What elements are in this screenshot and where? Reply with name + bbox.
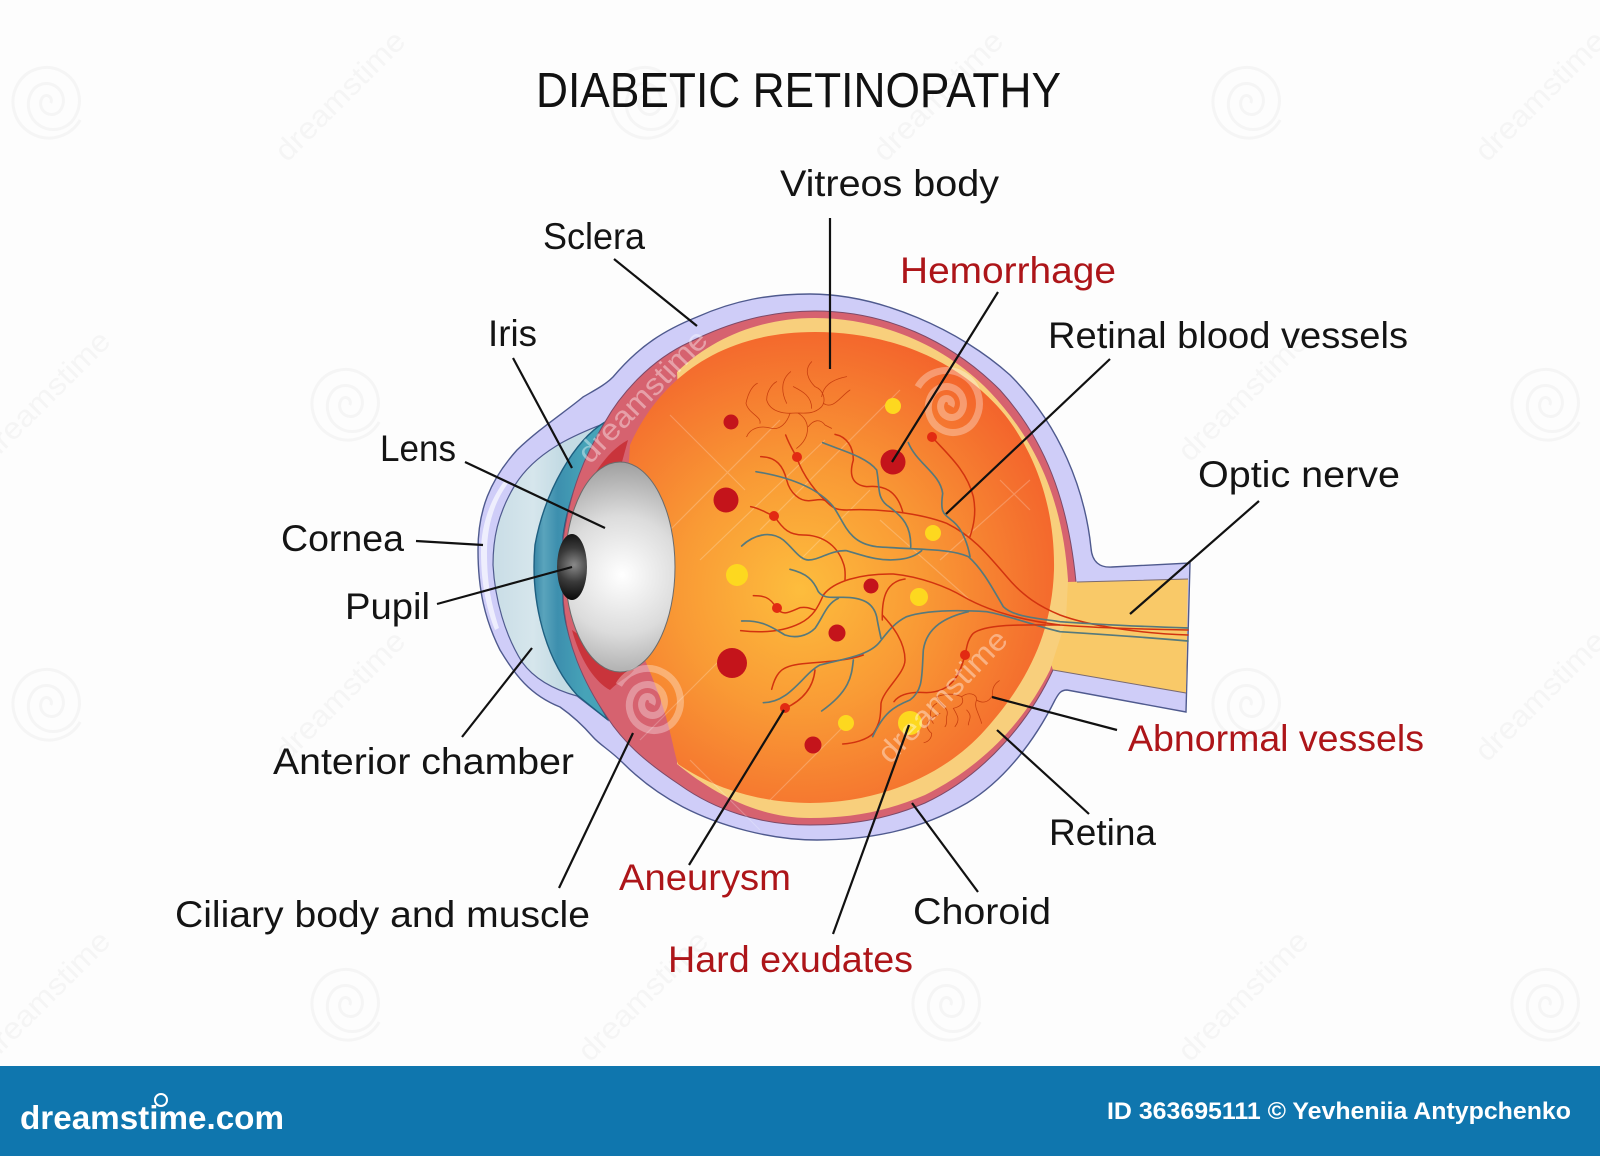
hemorrhage spots bbox=[714, 414, 906, 754]
choroid and ciliary body bbox=[563, 311, 1076, 825]
label: Retinal blood vessels: Retinal blood vessels bbox=[1048, 315, 1408, 356]
watermark pattern: dreamstime bbox=[269, 24, 412, 168]
logo text: dreamstime.com bbox=[20, 1099, 284, 1136]
abnormal vessels upper bbox=[746, 362, 850, 448]
watermark pattern: dreamstime bbox=[572, 924, 715, 1068]
retina bbox=[677, 318, 1068, 818]
label: Hemorrhage: Hemorrhage bbox=[900, 250, 1116, 291]
label: Iris: Iris bbox=[488, 313, 537, 354]
dark ciliary muscle bbox=[570, 440, 634, 690]
watermark crosses bbox=[640, 390, 1030, 830]
hard exudates bbox=[726, 398, 941, 735]
watermark pattern: dreamstime bbox=[269, 624, 412, 768]
logo spiral bbox=[155, 1094, 167, 1106]
cornea highlight bbox=[481, 480, 509, 630]
label: Lens bbox=[380, 428, 605, 528]
label: Sclera: Sclera bbox=[543, 216, 645, 257]
label: Sclera bbox=[543, 216, 697, 326]
watermark pattern: dreamstime bbox=[867, 24, 1010, 168]
label: Choroid: Choroid bbox=[913, 891, 1051, 932]
watermark over eye bbox=[571, 323, 1015, 770]
label: Pupil bbox=[345, 567, 572, 627]
watermark pattern: dreamstime bbox=[1172, 924, 1315, 1068]
anterior chamber bbox=[493, 423, 608, 720]
label: Hemorrhage bbox=[892, 250, 1116, 462]
label: Anterior chamber: Anterior chamber bbox=[273, 741, 574, 782]
sclera bbox=[478, 294, 1190, 840]
label: Aneurysm: Aneurysm bbox=[619, 857, 791, 898]
eye diagram bbox=[478, 294, 1190, 840]
vitreous body bbox=[620, 332, 1054, 803]
abnormal vessels lower bbox=[924, 681, 999, 743]
label: Retinal blood vessels bbox=[946, 315, 1408, 514]
label: Abnormal vessels bbox=[992, 697, 1424, 759]
watermark pattern: dreamstime bbox=[1172, 324, 1315, 468]
label: Anterior chamber bbox=[273, 648, 574, 782]
retinal blood vessels lower bbox=[763, 612, 1060, 744]
label: Ciliary body and muscle: Ciliary body and muscle bbox=[175, 894, 590, 935]
label: Pupil: Pupil bbox=[345, 586, 430, 627]
optic nerve bbox=[1030, 579, 1188, 693]
label: Aneurysm bbox=[619, 710, 791, 898]
watermark over eye: dreamstime bbox=[571, 323, 715, 470]
label: Abnormal vessels: Abnormal vessels bbox=[1128, 718, 1424, 759]
label: Cornea: Cornea bbox=[281, 518, 404, 559]
label: Hard exudates bbox=[668, 725, 913, 980]
label: Vitreos body: Vitreos body bbox=[780, 163, 1000, 204]
label: Optic nerve: Optic nerve bbox=[1198, 454, 1400, 495]
label: Hard exudates: Hard exudates bbox=[668, 939, 913, 980]
label: Lens: Lens bbox=[380, 428, 456, 469]
label: Cornea bbox=[281, 518, 483, 559]
label: Retina bbox=[997, 730, 1156, 853]
footer banner bbox=[0, 1066, 1600, 1156]
label: Retina: Retina bbox=[1049, 812, 1156, 853]
retinal blood vessels upper bbox=[741, 434, 1188, 642]
aneurysms bbox=[769, 432, 970, 713]
image credit: ID 363695111 © Yevheniia Antypchenko bbox=[1107, 1098, 1571, 1125]
iris bbox=[534, 422, 608, 720]
watermark pattern: dreamstime bbox=[1469, 24, 1600, 168]
title: DIABETIC RETINOPATHY bbox=[536, 64, 1061, 118]
label: Iris bbox=[488, 313, 572, 468]
watermark over eye: dreamstime bbox=[871, 623, 1015, 770]
lens bbox=[565, 462, 675, 672]
label: Choroid bbox=[912, 803, 1051, 932]
label: Optic nerve bbox=[1130, 454, 1400, 614]
watermark pattern: dreamstime bbox=[1469, 624, 1600, 768]
nerve outline bbox=[1053, 579, 1188, 693]
pupil bbox=[557, 534, 587, 600]
label: Ciliary body and muscle bbox=[175, 733, 633, 935]
